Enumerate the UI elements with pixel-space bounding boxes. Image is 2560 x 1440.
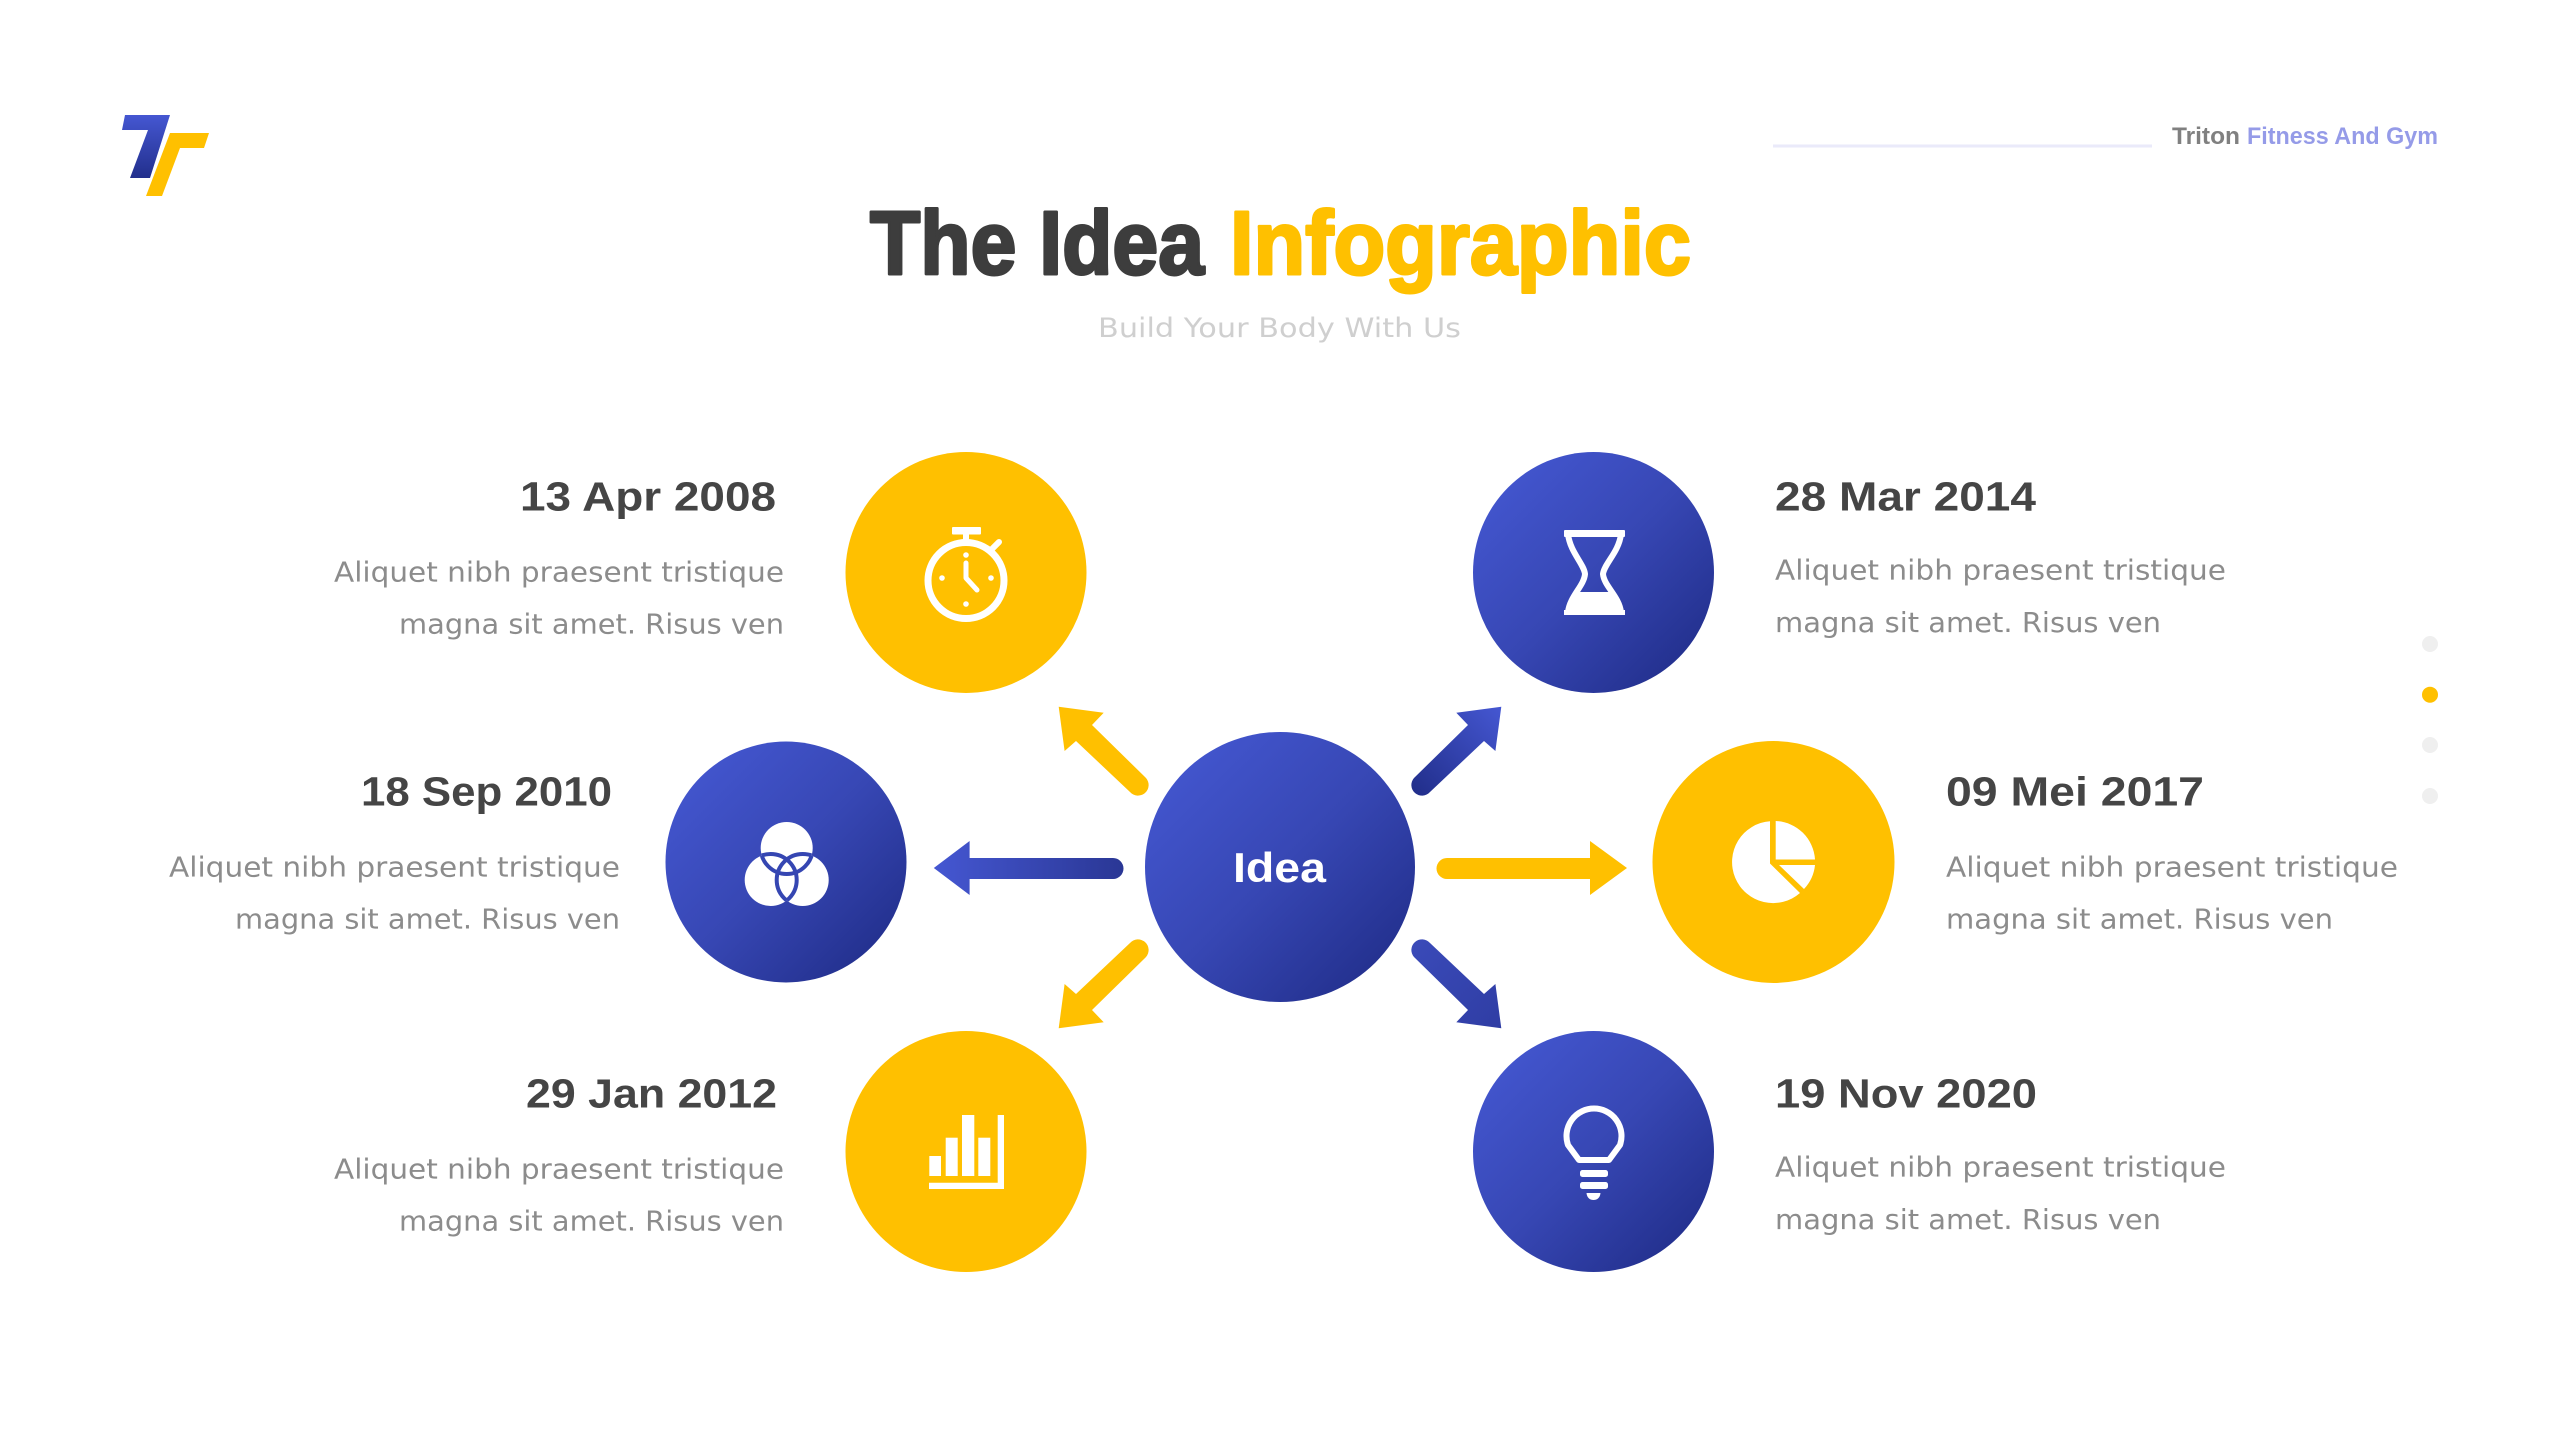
text block: 28 Mar 2014: 28 Mar 2014 [1775,474,2036,520]
title: Infographic [1230,194,1691,294]
node: light bulb (blue) [1473,1031,1714,1272]
text block: 19 Nov 2020: magna sit amet. Risus ven [1775,1203,2161,1236]
page indicator dots [2422,636,2438,804]
subtitle: Build Your Body With Us [1098,313,1461,344]
text block: 28 Mar 2014 [1775,474,2226,639]
node: pie chart (yellow) [1652,741,1894,983]
header brand line and label: Triton [2172,123,2240,150]
text block: 29 Jan 2012: Aliquet nibh praesent tristique [334,1152,784,1186]
text block: 09 Mei 2017 [1946,768,2398,936]
centre node: Idea [1145,732,1415,1002]
arrow: to right [1436,841,1627,895]
arrow: to bottom left [1059,939,1149,1028]
text block: 09 Mei 2017: magna sit amet. Risus ven [1946,902,2333,936]
logo [122,115,209,196]
text block: 18 Sep 2010: magna sit amet. Risus ven [235,902,620,936]
header brand line and label: Fitness And Gym [2247,123,2438,150]
text block: 13 Apr 2008: 13 Apr 2008 [520,474,776,520]
title [870,194,1691,294]
text block: 19 Nov 2020: 19 Nov 2020 [1775,1070,2037,1116]
text block: 29 Jan 2012 [334,1070,784,1238]
text block: 13 Apr 2008 [334,474,784,640]
node: stopwatch (yellow) [846,452,1086,693]
node: venn diagram (blue) [666,742,906,982]
arrow: to bottom right [1411,939,1501,1028]
arrow: to left [934,841,1124,895]
text block: 29 Jan 2012: 29 Jan 2012 [526,1070,777,1116]
title: The Idea [870,194,1205,294]
text block: 13 Apr 2008: Aliquet nibh praesent tristique [334,556,784,588]
text block: 28 Mar 2014: Aliquet nibh praesent tristique [1775,554,2226,586]
node: hourglass (blue) [1473,452,1714,693]
centre node: Idea: Idea [1233,844,1327,891]
text block: 18 Sep 2010 [169,768,620,936]
text block: 18 Sep 2010: Aliquet nibh praesent tristique [169,850,620,884]
arrow: to top left [1059,707,1149,796]
text block: 09 Mei 2017: 09 Mei 2017 [1946,768,2204,814]
text block: 13 Apr 2008: magna sit amet. Risus ven [399,608,784,640]
text block: 19 Nov 2020: Aliquet nibh praesent tristique [1775,1150,2226,1184]
header brand line and label [1773,123,2438,150]
arrow: to top right [1411,707,1501,796]
text block: 29 Jan 2012: magna sit amet. Risus ven [399,1204,784,1238]
node: bar chart (yellow) [846,1031,1086,1272]
text block: 19 Nov 2020 [1775,1070,2226,1236]
text block: 28 Mar 2014: magna sit amet. Risus ven [1775,606,2161,639]
text block: 18 Sep 2010: 18 Sep 2010 [361,768,612,814]
text block: 09 Mei 2017: Aliquet nibh praesent tristique [1946,850,2398,884]
